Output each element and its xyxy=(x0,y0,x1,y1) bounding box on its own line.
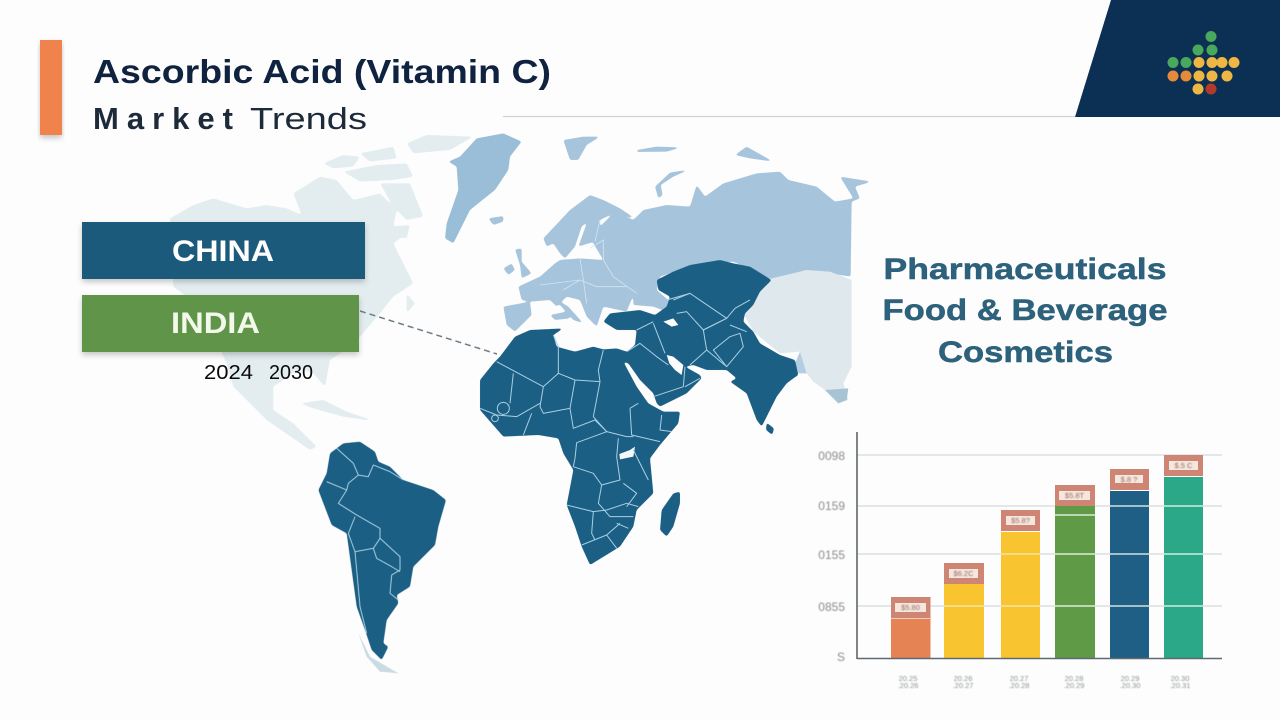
x axis labels: 20.29 xyxy=(1121,674,1139,683)
x axis labels: 20.25 xyxy=(899,674,917,683)
bar value labels: $5.80 xyxy=(901,603,920,612)
map: Eurasia light regions xyxy=(445,133,872,332)
map: Novaya Zemlya xyxy=(655,169,690,198)
accent bar xyxy=(40,40,62,135)
map: Iceland xyxy=(488,216,503,225)
x axis labels: .20.26 xyxy=(898,681,918,690)
x axis labels: .20.27 xyxy=(953,681,973,690)
banner: India: INDIA xyxy=(171,307,260,340)
map: United Kingdom xyxy=(515,248,532,278)
sector list: Cosmetics xyxy=(938,336,1113,369)
y axis labels: 0155 xyxy=(818,548,845,562)
bar value labels: $6.2C xyxy=(953,569,974,578)
x axis labels: 20.28 xyxy=(1065,674,1083,683)
x axis labels: 20.30 xyxy=(1171,674,1189,683)
x axis labels: .20.30 xyxy=(1120,681,1140,690)
map: Caspian Sea xyxy=(663,318,678,327)
y axis labels: 0098 xyxy=(818,449,845,463)
bar value labels: $.5 C xyxy=(1175,461,1193,470)
map: South America xyxy=(318,442,446,673)
banner: India xyxy=(82,295,359,352)
map: Ireland xyxy=(503,263,515,275)
banner: China: CHINA xyxy=(172,235,274,268)
y axis labels xyxy=(818,449,845,664)
y axis labels: S xyxy=(837,650,845,664)
bars xyxy=(891,477,1203,658)
map: Greenland xyxy=(445,133,522,243)
bar value labels: $5.8T xyxy=(1065,491,1085,500)
y axis labels: 0855 xyxy=(818,600,845,614)
bar chart xyxy=(818,432,1222,690)
map: Europe borders xyxy=(540,220,637,303)
sector list: Food & Beverage xyxy=(882,294,1168,327)
bar value labels: $5.8? xyxy=(1011,516,1030,525)
icon: dot logo xyxy=(1168,31,1240,94)
x axis labels: 20.27 xyxy=(1010,674,1028,683)
bar value tags xyxy=(891,455,1203,618)
x axis labels: .20.28 xyxy=(1009,681,1029,690)
map: Italy and Balkans xyxy=(555,298,583,323)
banner: China xyxy=(82,222,365,279)
map: Africa, Middle East and South Asia xyxy=(480,260,798,565)
map: Russia xyxy=(593,172,872,312)
map: Madagascar xyxy=(660,492,680,537)
map: Svalbard xyxy=(563,137,600,160)
y axis labels: 0159 xyxy=(818,499,845,513)
x axis labels: 20.26 xyxy=(954,674,972,683)
map: Persian Gulf xyxy=(667,355,683,375)
bar value labels xyxy=(901,461,1193,612)
map: East Asia (pale) xyxy=(743,270,852,403)
x axis labels xyxy=(898,674,1190,690)
header: rule xyxy=(503,116,1075,118)
sector list xyxy=(882,253,1168,369)
sector list: Pharmaceuticals xyxy=(884,253,1166,286)
map: South America borders xyxy=(327,448,403,633)
gridlines xyxy=(857,455,1222,606)
world map xyxy=(170,133,872,673)
header: navy corner panel xyxy=(1075,0,1280,117)
bar value labels: $.8 ? xyxy=(1121,475,1137,484)
map: North America (pale) xyxy=(170,135,473,450)
map: Scandinavia xyxy=(543,195,635,258)
map: Lake Victoria xyxy=(619,447,635,459)
subtitle xyxy=(93,101,367,136)
bar gridline highlights xyxy=(891,506,1203,618)
title: Ascorbic Acid (Vitamin C) xyxy=(93,53,551,90)
map: Central and Western Europe xyxy=(518,258,633,327)
subtitle: Trends xyxy=(250,101,367,136)
year labels: 2024 xyxy=(204,361,253,384)
axes xyxy=(857,432,1222,659)
year labels: 2030 xyxy=(269,361,313,384)
year labels xyxy=(204,361,313,384)
x axis labels: .20.31 xyxy=(1170,681,1190,690)
map: Sri Lanka xyxy=(766,423,774,435)
subtitle: Market xyxy=(93,101,233,136)
x axis labels: .20.29 xyxy=(1064,681,1084,690)
map: country borders xyxy=(480,293,750,548)
dashed connector xyxy=(360,311,497,354)
map: Iberia xyxy=(503,302,532,332)
